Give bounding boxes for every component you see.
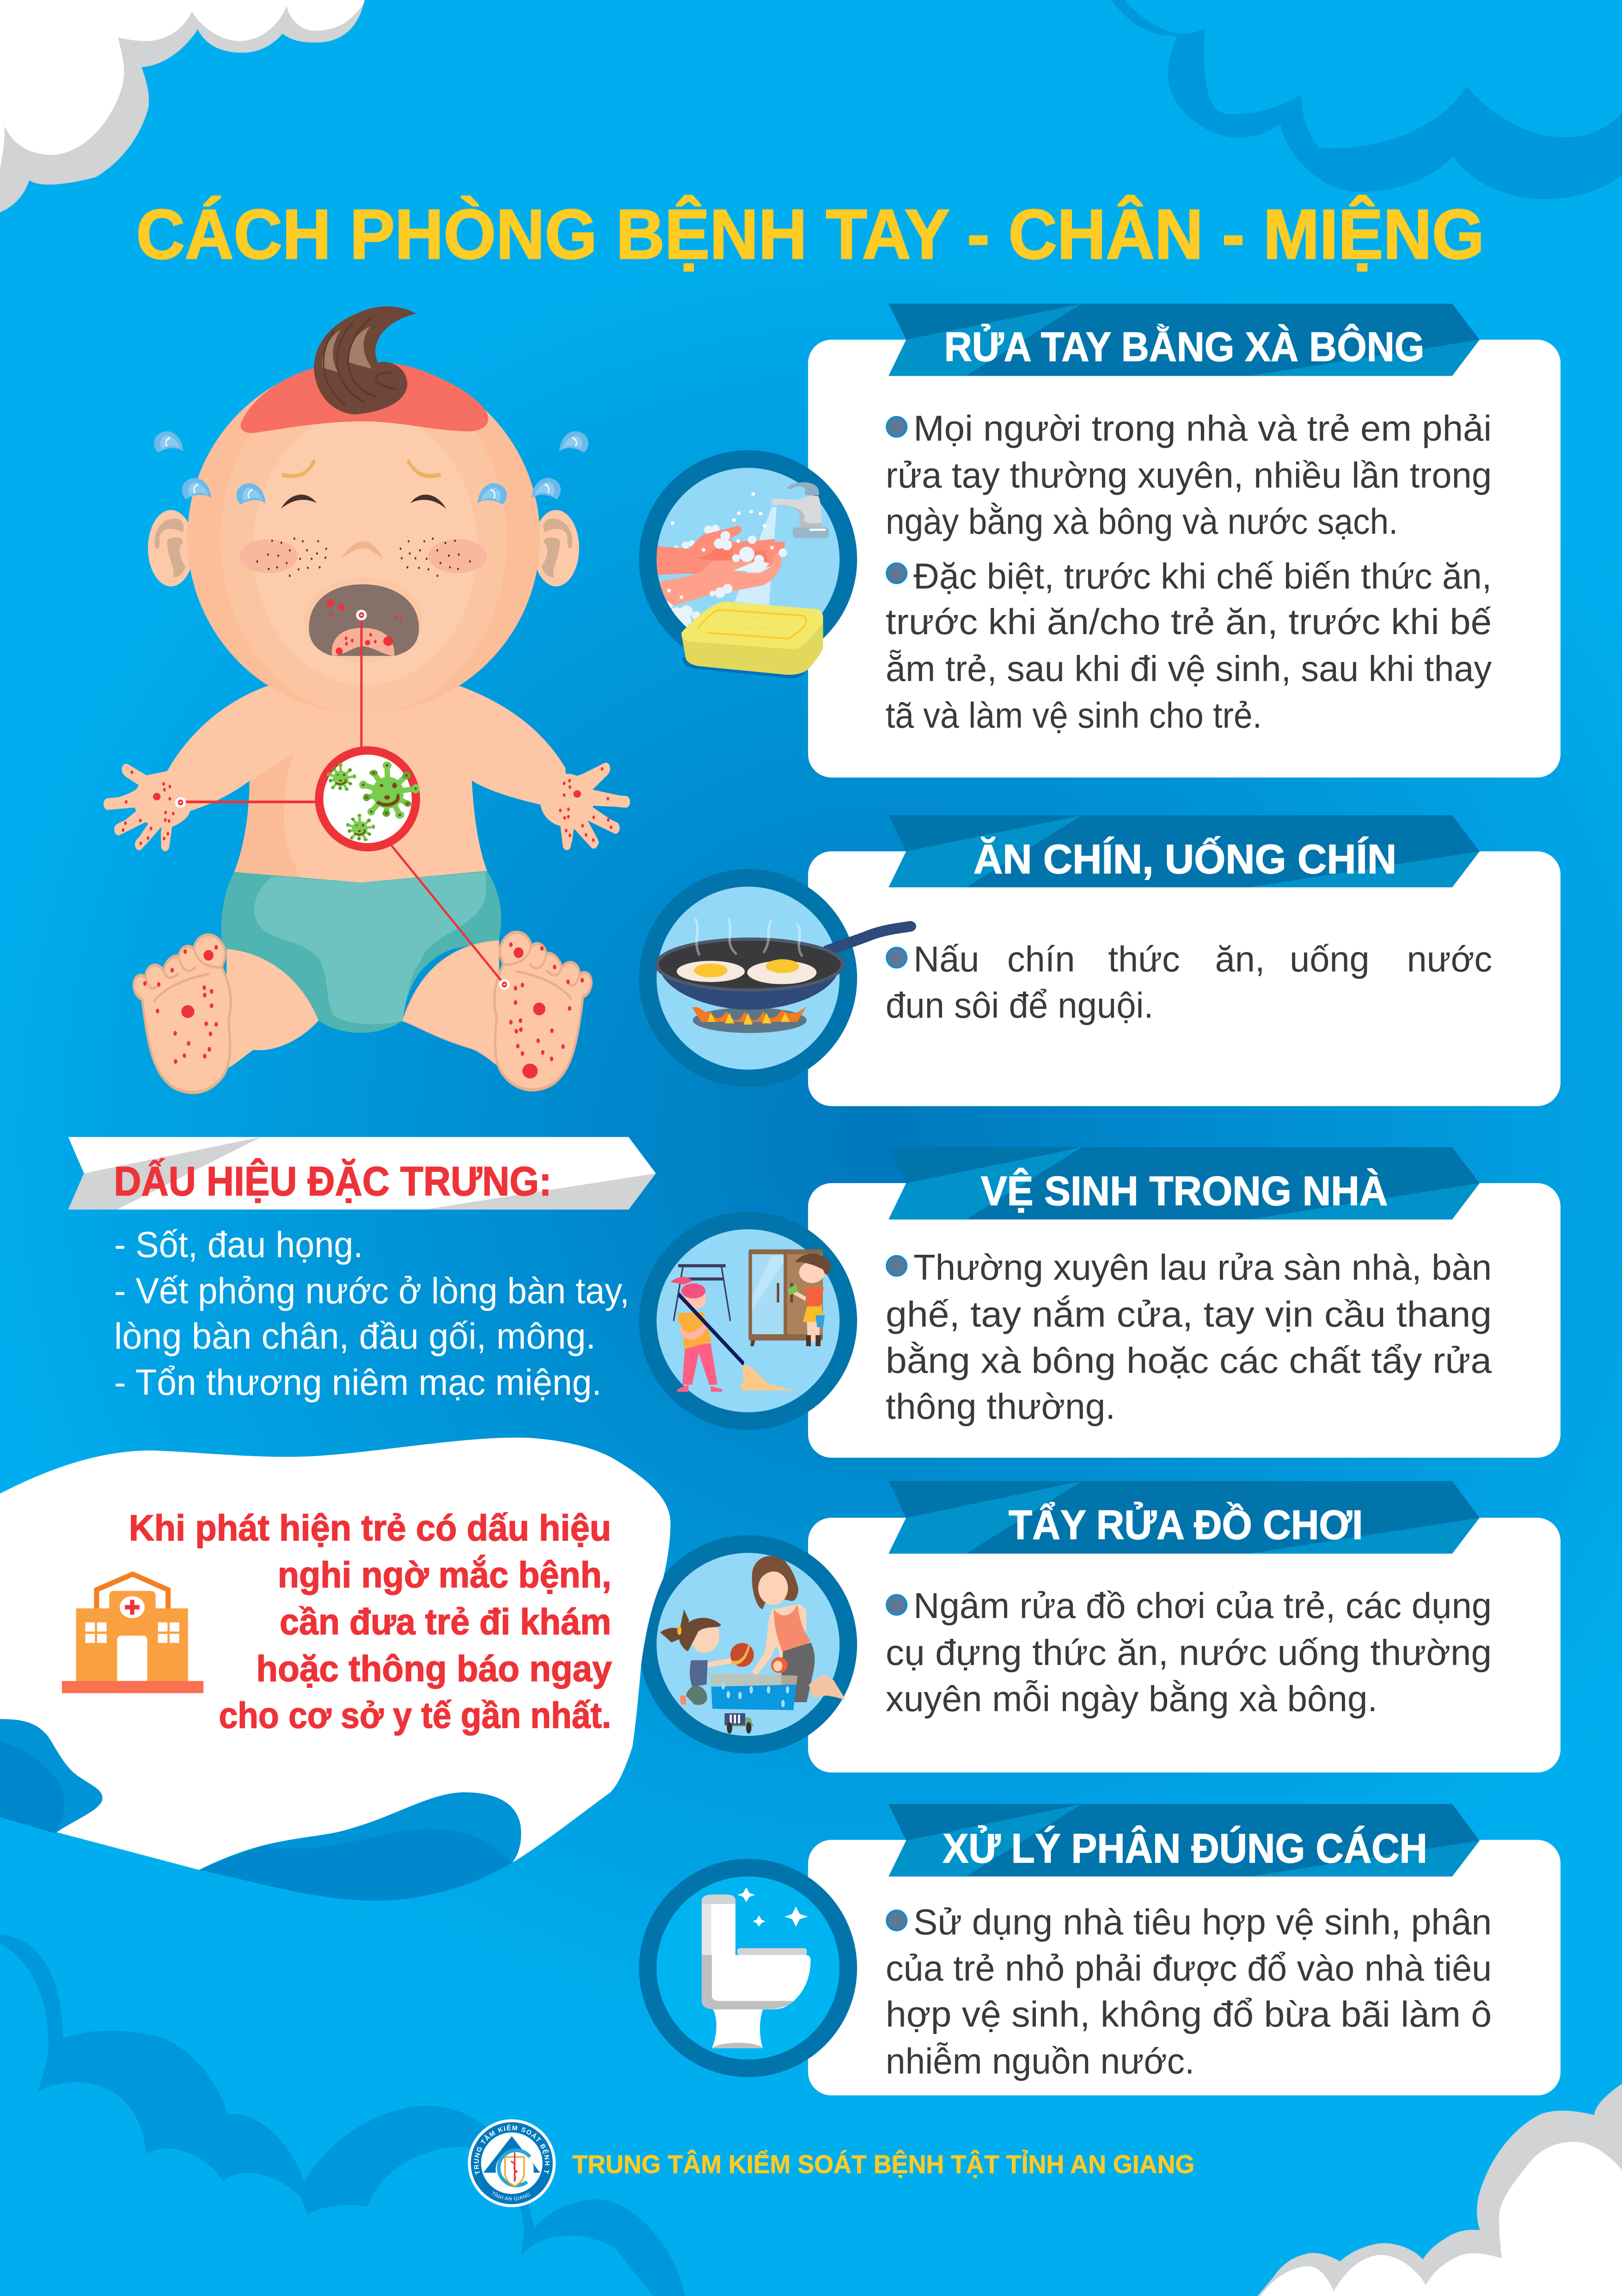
panel: clean house: [639, 1147, 1561, 1458]
icon: faucet: [771, 482, 829, 538]
top-right cloud: [1111, 0, 1622, 199]
bullet text: Sử dụng nhà tiêu hợp vệ sinh, phân: [913, 1902, 1492, 1942]
bullet text: Đặc biệt, trước khi chế biến thức ăn,: [913, 557, 1492, 597]
callout text: cần đưa trẻ đi khám: [280, 1601, 611, 1642]
callout text: hoặc thông báo ngay: [256, 1648, 612, 1689]
heading: VỆ SINH TRONG NHÀ: [981, 1168, 1388, 1214]
signs list: - Vết phỏng nước ở lòng bàn tay,: [114, 1270, 630, 1311]
girl wiping: [788, 1254, 831, 1346]
burner: [692, 1006, 807, 1033]
icon: mopping and wiping: [671, 1249, 831, 1392]
bullet text: xuyên mỗi ngày bằng xà bông.: [886, 1679, 1377, 1719]
bullet text: nước: [1407, 940, 1492, 979]
virus small top: [327, 763, 356, 791]
pan handle: [828, 926, 910, 950]
bullet text: đun sôi để nguội.: [886, 986, 1154, 1026]
face: brows, eyes, cheeks, nose: [239, 462, 487, 576]
cabinet: [748, 1249, 823, 1346]
bullet text: thông thường.: [886, 1387, 1115, 1427]
ring: [639, 1859, 857, 2077]
bullet text: uống: [1290, 940, 1370, 979]
signs list: - Tổn thương niêm mạc miệng.: [114, 1362, 602, 1403]
sparkles: [737, 1887, 808, 1927]
callout text: [129, 1507, 612, 1736]
girl mopping: [671, 1277, 722, 1392]
pan body: [658, 964, 841, 1010]
callout text: Khi phát hiện trẻ có dấu hiệu: [129, 1507, 611, 1548]
right foot: [494, 932, 592, 1090]
footer organization name: TRUNG TÂM KIỂM SOÁT BỆNH TẬT TỈNH AN GIANG: [572, 2150, 1194, 2179]
ring: [639, 1212, 857, 1430]
bullet text: [886, 1586, 1492, 1719]
tears: [154, 431, 588, 505]
signs list: [114, 1224, 630, 1403]
pedestal: [712, 2009, 763, 2048]
heading: signs: DẤU HIỆU ĐẶC TRƯNG:: [114, 1158, 551, 1204]
heading: RỬA TAY BẰNG XÀ BÔNG: [944, 324, 1424, 370]
bullet text: [886, 1902, 1492, 2081]
signs list: - Sốt, đau họng.: [114, 1224, 363, 1265]
tub: [711, 1673, 797, 1710]
banner: [888, 1147, 1480, 1220]
icon: hospital: [62, 1574, 203, 1693]
icon: toilet: [702, 1887, 811, 2048]
hands and fingers: [108, 769, 626, 845]
bullet text: ẵm trẻ, sau khi đi vệ sinh, sau khi thay: [886, 649, 1492, 689]
banner: [888, 815, 1480, 887]
panel: wash hands: [639, 304, 1561, 777]
bullet text: Nấu: [913, 940, 979, 979]
fever band: [241, 362, 488, 433]
eggs: [677, 959, 817, 984]
bullet text: [886, 1248, 1492, 1427]
toy truck: [725, 1713, 753, 1734]
bullet text: tã và làm vệ sinh cho trẻ.: [886, 696, 1262, 736]
hair: [314, 306, 416, 415]
card: [808, 1840, 1561, 2095]
virus small bottom: [346, 814, 375, 842]
signs list: lòng bàn chân, đầu gối, mông.: [114, 1315, 596, 1356]
card: [808, 1183, 1561, 1458]
bullet text: của trẻ nhỏ phải được đổ vào nhà tiêu: [886, 1949, 1492, 1989]
bullet text: Thường xuyên lau rửa sàn nhà, bàn: [913, 1248, 1492, 1288]
callout text: cho cơ sở y tế gần nhất.: [219, 1695, 611, 1736]
ball: [730, 1643, 754, 1667]
bottom-left background clouds: [0, 1934, 685, 2296]
ring: [639, 450, 857, 668]
bullet text: ngày bằng xà bông và nước sạch.: [886, 502, 1398, 542]
heading: ĂN CHÍN, UỐNG CHÍN: [973, 836, 1396, 882]
connector markers: [175, 610, 510, 990]
logo: TRUNG TÂM KIỂM SOÁT BỆNH TẬT: [0, 0, 551, 2175]
bullet text: cụ đựng thức ăn, nước uống thường: [886, 1633, 1492, 1673]
heading: TẨY RỬA ĐỒ CHƠI: [1009, 1502, 1363, 1548]
title: CÁCH PHÒNG BỆNH TAY - CHÂN - MIỆNG: [136, 195, 1484, 274]
bullet text: chín: [1007, 940, 1075, 979]
mouth with rash: [304, 577, 423, 662]
mother: [752, 1556, 845, 1702]
virus big: [359, 762, 419, 818]
bullet text: nhiễm nguồn nước.: [886, 2041, 1194, 2081]
panel: clean toys: [639, 1481, 1561, 1772]
bullet text: thức: [1108, 940, 1180, 979]
panel: eat cooked: [639, 815, 1561, 1106]
tank: [702, 1894, 735, 1958]
torso shadow: [234, 752, 301, 879]
ring: [639, 1535, 857, 1753]
steam: [695, 918, 802, 957]
banner: [888, 304, 1480, 376]
bullet text: ghế, tay nắm cửa, tay vịn cầu thang: [886, 1295, 1492, 1335]
ring: [639, 869, 857, 1087]
child: [660, 1609, 731, 1705]
head: [187, 361, 540, 714]
bowl: [702, 1955, 811, 2009]
banner: [888, 1804, 1480, 1876]
bullet text: [886, 409, 1492, 736]
icon: frying pan on stove: [657, 918, 910, 1033]
card: [808, 340, 1561, 777]
seat lid: [737, 1948, 807, 1955]
bottom-right cloud: [1257, 2084, 1622, 2296]
baby body and arms: [104, 686, 630, 883]
bullet text: bằng xà bông hoặc các chất tẩy rửa: [886, 1341, 1492, 1380]
icon: mother and child washing toys: [660, 1556, 845, 1734]
bullet text: trước khi ăn/cho trẻ ăn, trước khi bế: [886, 602, 1492, 642]
doll: [771, 1657, 788, 1673]
card: [808, 1518, 1561, 1772]
panel: waste handling: [639, 1804, 1561, 2095]
bullet text: [886, 940, 1492, 1026]
banner: [888, 1481, 1480, 1554]
bullet text: ăn,: [1215, 940, 1265, 979]
table: [673, 1266, 730, 1321]
bullet text: Mọi người trong nhà và trẻ em phải: [913, 409, 1492, 449]
ears: [148, 510, 579, 586]
logo: TỈNH AN GIANG: [490, 2191, 532, 2202]
icon: soap: [681, 601, 823, 678]
diaper: [221, 871, 501, 1033]
bullet text: rửa tay thường xuyên, nhiều lần trong: [886, 456, 1492, 495]
callout blob: [0, 1438, 670, 1901]
legs: [226, 941, 499, 1069]
card: [808, 851, 1561, 1106]
top-left cloud: [0, 0, 365, 212]
bullet text: hợp vệ sinh, không đổ bừa bãi làm ô: [886, 1995, 1492, 2034]
bullet text: Ngâm rửa đồ chơi của trẻ, các dụng: [913, 1586, 1492, 1626]
left foot: [134, 935, 231, 1093]
connector lines: [181, 615, 504, 984]
callout text: nghi ngờ mắc bệnh,: [278, 1554, 612, 1595]
signs banner: [68, 1137, 656, 1209]
mop: [679, 1295, 794, 1391]
virus magnifier: [319, 751, 419, 847]
icon: washing hands and foam: [656, 494, 787, 629]
hand rash spots: [123, 769, 611, 843]
baby illustration: [104, 306, 630, 1093]
heading: XỬ LÝ PHÂN ĐÚNG CÁCH: [943, 1825, 1427, 1871]
